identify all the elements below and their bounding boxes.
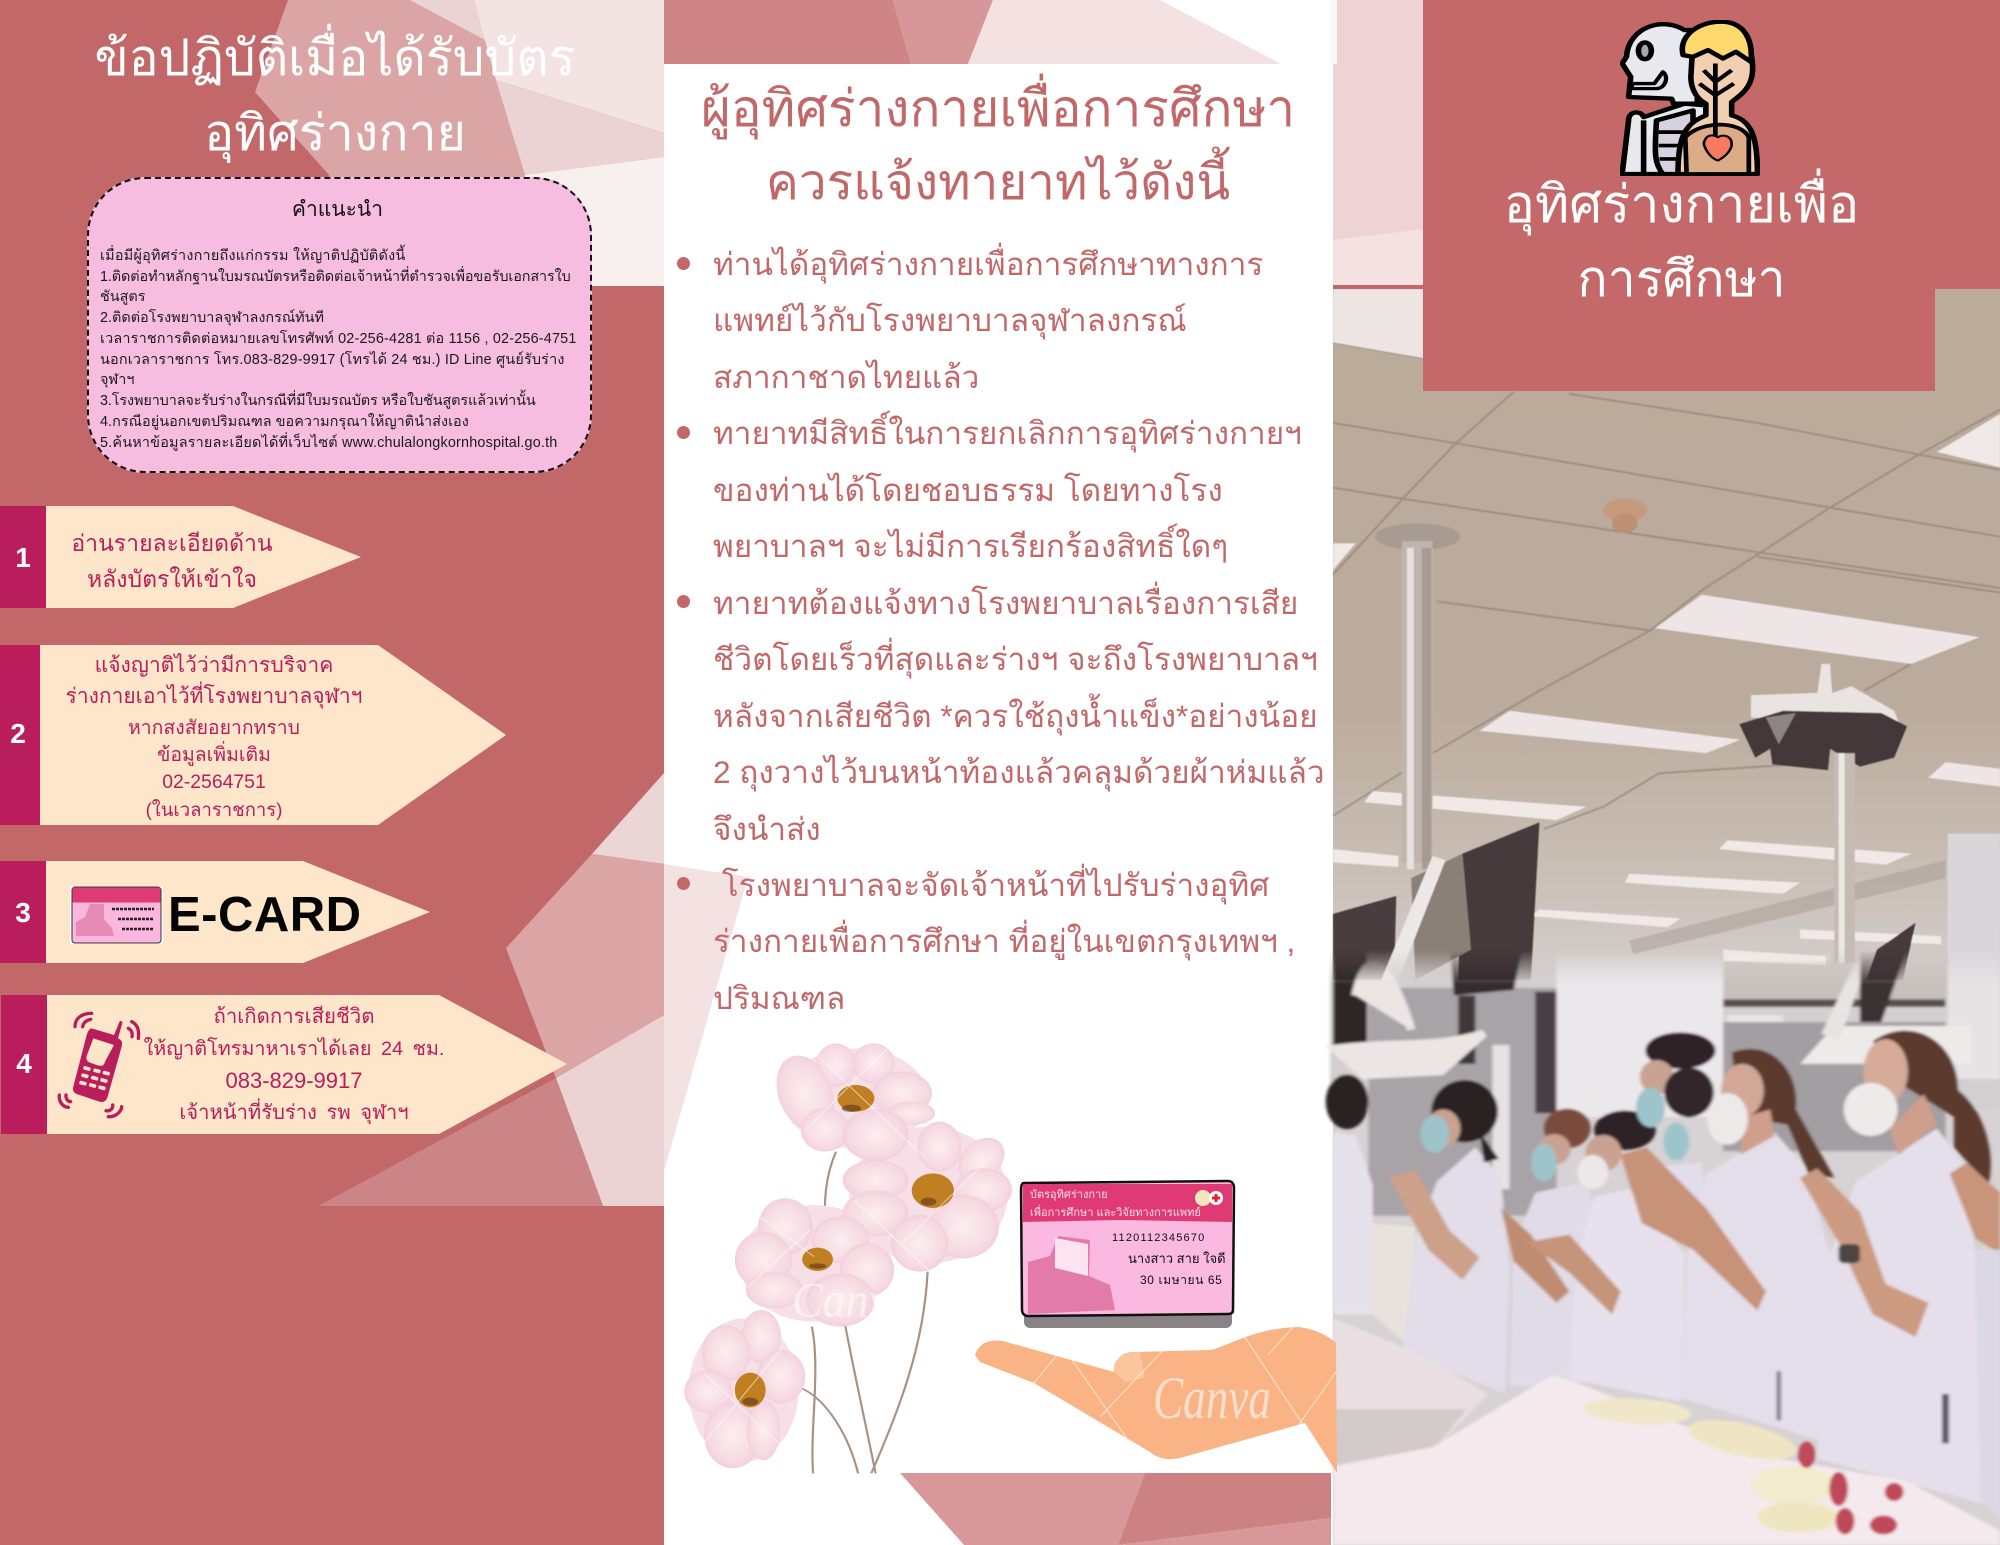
text block: list of notes: แพทย์ไว้กับโรงพยาบาลจุฬาลงกรณ์: [713, 302, 1187, 338]
watermark: Canva: [1153, 1365, 1271, 1431]
heading: cover title: การศึกษา: [1577, 251, 1786, 307]
step 2 text: (ในเวลาราชการ): [146, 799, 282, 820]
step 4 arrow: [1, 995, 567, 1134]
text block: list of notes: [713, 242, 1325, 1016]
step 1 text: [71, 530, 273, 592]
text block: list of notes: จึงนำส่ง: [713, 811, 821, 847]
step 4 text: [144, 1006, 444, 1124]
illustration: pink cosmos flowers: [684, 1043, 1012, 1474]
card body text: เมื่อมีผู้อุทิศร่างกายถึงแก่กรรม ให้ญาติปฏิบัติดังนี้: [100, 248, 405, 264]
card body text: 3.โรงพยาบาลจะรับร่างในกรณีที่มีใบมรณบัตร หรือใบชันสูตรแล้วเท่านั้น: [100, 393, 536, 409]
donor card: เพื่อการศึกษา และวิจัยทางการแพทย์: [1030, 1204, 1201, 1219]
text block: list of notes: สภากาชาดไทยแล้ว: [713, 359, 979, 395]
text block: list of notes: ปริมณฑล: [713, 980, 845, 1016]
text block: list of notes: ทายาทต้องแจ้งทางโรงพยาบาลเรื่องการเสีย: [713, 585, 1298, 621]
hand: [975, 1327, 1337, 1473]
card body text: จุฬาฯ: [100, 372, 134, 388]
text block: list of notes: พยาบาลฯ จะไม่มีการเรียกร้องสิทธิ์ใดๆ: [713, 528, 1228, 564]
card heading: คำแนะนำ: [292, 198, 383, 221]
panel: instructions card: [87, 177, 592, 473]
step 2 text: ร่างกายเอาไว้ที่โรงพยาบาลจุฬาฯ: [66, 685, 362, 708]
step 4 text: ให้ญาติโทรมาหาเราได้เลย 24 ชม.: [144, 1038, 444, 1060]
card body text: 5.ค้นหาข้อมูลรายละเอียดได้ที่เว็บไซต์ www.chulalongkornhospital.go.th: [100, 435, 558, 451]
E-CARD label: E-CARD: [168, 888, 362, 942]
step 4 text: 083-829-9917: [225, 1068, 362, 1093]
text block: list of notes: หลังจากเสียชีวิต *ควรใช้ถุงน้ำแข็ง*อย่างน้อย: [713, 698, 1318, 734]
icon: mini donor card: [70, 886, 163, 944]
panel: cover title block: [1423, 0, 2000, 391]
card body text: [100, 244, 577, 451]
text block: list of notes: โรงพยาบาลจะจัดเจ้าหน้าที่ไปรับร่างอุทิศ: [722, 867, 1269, 903]
bottom geometric band: [900, 1473, 1331, 1545]
icon: skeleton and anatomy figure: [1620, 20, 1760, 176]
icon: ringing phone: [58, 1012, 140, 1118]
step 2 text: [66, 653, 362, 820]
panel: left background: [0, 0, 664, 1545]
number 3: 3: [15, 897, 31, 928]
donor card: [1020, 1180, 1236, 1328]
panel: centre column: [664, 0, 1280, 64]
card body text: ชันสูตร: [100, 289, 145, 305]
arrow shape: [0, 645, 506, 825]
number 2: 2: [10, 718, 26, 749]
top geometric band: [664, 0, 1280, 64]
panel: top-right pale strip: [1333, 0, 1423, 289]
heading: left title: ข้อปฏิบัติเมื่อได้รับบัตร: [94, 30, 576, 86]
heading: centre title: ควรแจ้งทายาทไว้ดังนี้: [766, 155, 1230, 210]
card body text: เวลาราชการติดต่อหมายเลขโทรศัพท์ 02-256-4281 ต่อ 1156 , 02-256-4751: [100, 331, 577, 347]
step 2 text: หากสงสัยอยากทราบ: [128, 717, 300, 739]
text block: list of notes: ร่างกายเพื่อการศึกษา ที่อยู่ในเขตกรุงเทพฯ ,: [713, 923, 1295, 959]
step 2 arrow: [0, 645, 506, 825]
step 2 text: 02-2564751: [162, 771, 266, 793]
card body text: นอกเวลาราชการ โทร.083-829-9917 (โทรได้ 24 ชม.) ID Line ศูนย์รับร่าง: [100, 352, 565, 368]
text block: list of notes: 2 ถุงวางไว้บนหน้าท้องแล้วคลุมด้วยผ้าห่มแล้ว: [713, 754, 1325, 790]
step 1 text: อ่านรายละเอียดด้าน: [71, 530, 273, 556]
card body text: 1.ติดต่อทำหลักฐานใบมรณบัตรหรือติดต่อเจ้าหน้าที่ตำรวจเพื่อขอรับเอกสารใบ: [100, 269, 571, 285]
step 2 text: แจ้งญาติไว้ว่ามีการบริจาค: [95, 654, 333, 677]
text block: list of notes: ชีวิตโดยเร็วที่สุดและร่างฯ จะถึงโรงพยาบาลฯ: [713, 641, 1318, 677]
heading: centre title: [701, 74, 1295, 210]
photo: students paying respect in the dissection hall: [1323, 289, 2000, 1545]
pale polygon behind last bullet: [664, 864, 748, 1170]
heading: left title: [94, 24, 576, 163]
heading: cover title: อุทิศร่างกายเพื่อ: [1504, 176, 1859, 234]
number 4: 4: [16, 1048, 32, 1079]
arrow shape: [1, 995, 567, 1134]
donor card: นางสาว สาย ใจดี: [1128, 1251, 1226, 1266]
card body text: 2.ติดต่อโรงพยาบาลจุฬาลงกรณ์ทันที: [100, 310, 324, 326]
text block: list of notes: ท่านได้อุทิศร่างกายเพื่อการศึกษาทางการ: [713, 246, 1263, 282]
step 1 text: หลังบัตรให้เข้าใจ: [87, 566, 257, 592]
donor card: 30 เมษายน 65: [1140, 1273, 1222, 1287]
heading: left title: อุทิศร่างกาย: [204, 105, 466, 161]
step 4 text: เจ้าหน้าที่รับร่าง รพ จุฬาฯ: [179, 1102, 409, 1124]
arrow shape: [0, 506, 361, 608]
donor card: บัตรอุทิศร่างกาย: [1030, 1189, 1108, 1201]
text block: list of notes: ของท่านได้โดยชอบธรรม โดยทางโรง: [713, 472, 1223, 508]
donor card: 1120112345670: [1112, 1232, 1206, 1244]
illustration: donor card held over hand: [975, 1180, 1337, 1473]
step 2 text: ข้อมูลเพิ่มเติม: [157, 744, 271, 766]
bullet dots: [677, 257, 690, 890]
watermark: Canv: [792, 1272, 889, 1328]
arrow shape: [0, 861, 430, 963]
step 1 arrow: [0, 506, 361, 608]
heading: centre title: ผู้อุทิศร่างกายเพื่อการศึกษา: [701, 80, 1295, 137]
step 3 arrow: [0, 861, 430, 963]
number 1: 1: [15, 542, 31, 573]
card body text: 4.กรณีอยู่นอกเขตปริมณฑล ขอความกรุณาให้ญาตินำส่งเอง: [100, 414, 469, 430]
red background block: [1423, 0, 2000, 391]
heading: cover title: [1504, 168, 1859, 307]
step 4 text: ถ้าเกิดการเสียชีวิต: [214, 1006, 374, 1028]
text block: list of notes: ทายาทมีสิทธิ์ในการยกเลิกการอุทิศร่างกายฯ: [713, 415, 1302, 451]
